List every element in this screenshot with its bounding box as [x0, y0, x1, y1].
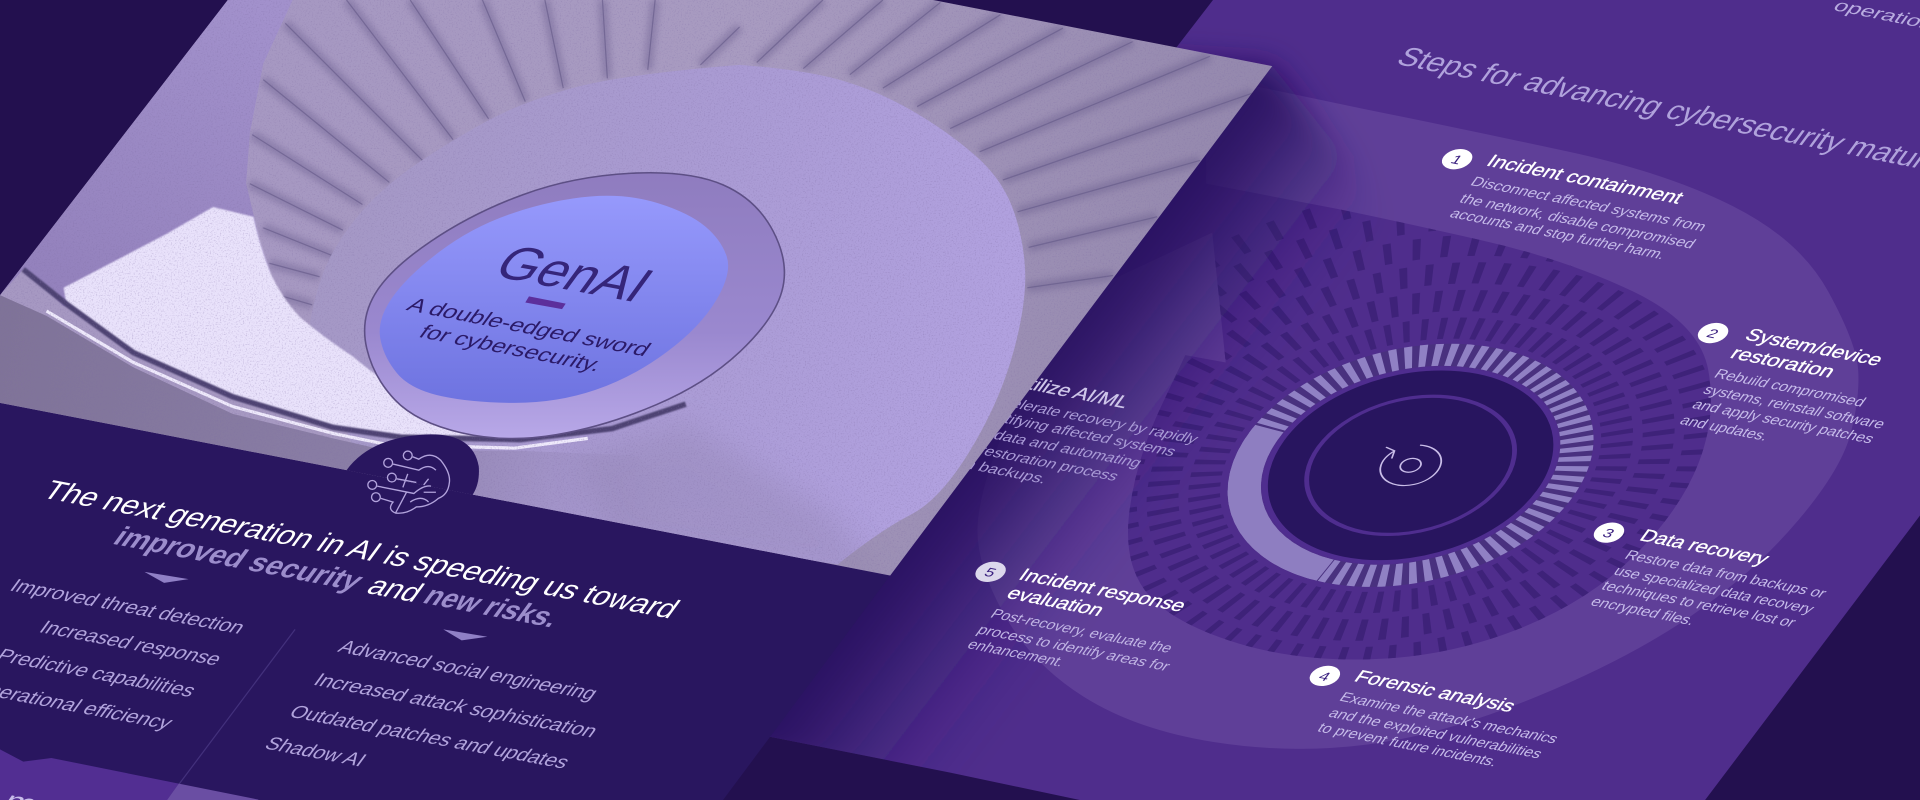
body utilize: and data and automating	[959, 422, 1145, 471]
badge 4	[1304, 663, 1346, 688]
thin white strip	[47, 311, 588, 448]
arrow: left column	[144, 572, 189, 583]
heading 2: restoration	[1726, 344, 1839, 381]
panel: right page	[770, 0, 1920, 800]
inner ring	[365, 173, 784, 439]
arrow: right column	[443, 629, 487, 640]
body 3	[1587, 548, 1830, 630]
heading 1: Incident containment	[1483, 152, 1688, 208]
dark swoosh edge	[23, 269, 686, 440]
list: risks: Shadow AI	[261, 733, 371, 770]
body 2: systems, reinstall software	[1700, 382, 1889, 432]
chart: spiral arrow band	[977, 76, 1858, 749]
lower grey concrete	[0, 295, 568, 512]
step 1	[1437, 147, 1710, 262]
body 2	[1677, 367, 1889, 447]
list: benefits	[0, 575, 250, 733]
body 3: techniques to retrieve lost or	[1598, 578, 1800, 630]
body 5: Post-recovery, evaluate the	[987, 607, 1176, 656]
white lit swoosh	[63, 206, 477, 437]
step: utilize AI/ML	[937, 372, 1202, 487]
badge 5	[970, 559, 1011, 584]
lower concrete tone	[590, 430, 860, 564]
step 3	[1587, 520, 1830, 630]
body utilize: the restoration process	[948, 438, 1122, 484]
shadow cast by photo	[770, 44, 1350, 762]
body 5: enhancement.	[964, 637, 1068, 670]
body 2: and apply security patches	[1689, 397, 1878, 447]
photo: spiral staircase	[0, 0, 1298, 588]
body utilize	[937, 391, 1202, 487]
stair shadows	[250, 0, 1253, 305]
badge 1: 1	[1447, 153, 1465, 168]
heading 4: Forensic analysis	[1350, 667, 1520, 716]
heading 3: Data recovery	[1636, 526, 1774, 569]
body 4: and the exploited vulnerabilities	[1325, 706, 1546, 761]
chart: tick ring with progress arc	[1186, 329, 1635, 601]
badge 3	[1588, 520, 1630, 545]
chart: radial dash rings	[1128, 208, 1711, 660]
icon: brain circuit	[368, 451, 450, 513]
badge 4: 4	[1315, 670, 1334, 684]
divider	[167, 629, 295, 800]
stair edges	[250, 0, 1253, 305]
body 4: Examine the attack's mechanics	[1336, 690, 1562, 747]
body 5	[964, 607, 1176, 674]
body 2: Rebuild compromised	[1711, 367, 1869, 410]
heading utilize: Utilize AI/ML	[1009, 372, 1134, 412]
body 5: process to identify areas for	[974, 622, 1174, 674]
list: risks: Increased attack sophistication	[309, 669, 602, 741]
body 1: the network, disable compromised	[1456, 191, 1699, 252]
spiral concrete	[310, 65, 1025, 564]
step 2	[1677, 321, 1889, 447]
concrete texture	[0, 0, 1298, 588]
body 3: use specialized data recovery	[1610, 564, 1818, 617]
list: benefits: Increased response	[35, 617, 227, 669]
body 2: and updates.	[1677, 413, 1772, 444]
headline: and	[361, 570, 430, 607]
bottom band	[0, 749, 258, 800]
title rule	[525, 296, 566, 309]
page surface	[0, 403, 890, 800]
icon: cycle	[1363, 439, 1452, 490]
body utilize: from backups.	[937, 452, 1051, 487]
step 4	[1304, 663, 1562, 770]
title: GenAI: GenAI	[484, 236, 664, 312]
chart: central disc	[1214, 346, 1607, 584]
badge 1	[1437, 147, 1478, 172]
heading 5: Incident response	[1015, 566, 1190, 616]
body 4: to prevent future incidents.	[1314, 720, 1502, 770]
badge 2	[1692, 321, 1734, 346]
brain tab	[347, 434, 479, 495]
body 3: Restore data from backups or	[1621, 548, 1830, 601]
headline: new risks.	[417, 580, 568, 633]
stair base	[0, 0, 1298, 588]
body 3: encrypted files.	[1587, 594, 1699, 628]
heading 2: System/device	[1741, 326, 1887, 370]
list: benefits: Improved threat detection	[6, 575, 250, 638]
page surface	[661, 0, 1920, 800]
subtitle: for cybersecurity.	[415, 321, 608, 375]
body 1	[1446, 174, 1710, 262]
body utilize: identifying affected systems	[970, 406, 1180, 459]
list: risks	[261, 636, 602, 772]
panel: left page	[0, 0, 1298, 800]
body 1: accounts and stop further harm.	[1446, 206, 1669, 262]
step 5	[964, 559, 1190, 674]
left wall	[0, 0, 293, 318]
badge 3: 3	[1599, 526, 1617, 541]
sky opening	[380, 196, 728, 403]
list: risks: Outdated patches and updates	[285, 701, 574, 772]
heading 5: evaluation	[1003, 584, 1108, 620]
headline: The next generation in AI is speeding us toward	[37, 474, 686, 624]
body utilize: Accelerate recovery by rapidly	[981, 391, 1202, 447]
subtitle: A double-edged sword	[403, 294, 656, 360]
badge 5: 5	[981, 566, 999, 580]
badge 2: 2	[1703, 327, 1721, 341]
body 1: Disconnect affected systems from	[1467, 174, 1710, 234]
list: risks: Advanced social engineering	[334, 636, 602, 704]
headline: improved security	[108, 521, 371, 596]
